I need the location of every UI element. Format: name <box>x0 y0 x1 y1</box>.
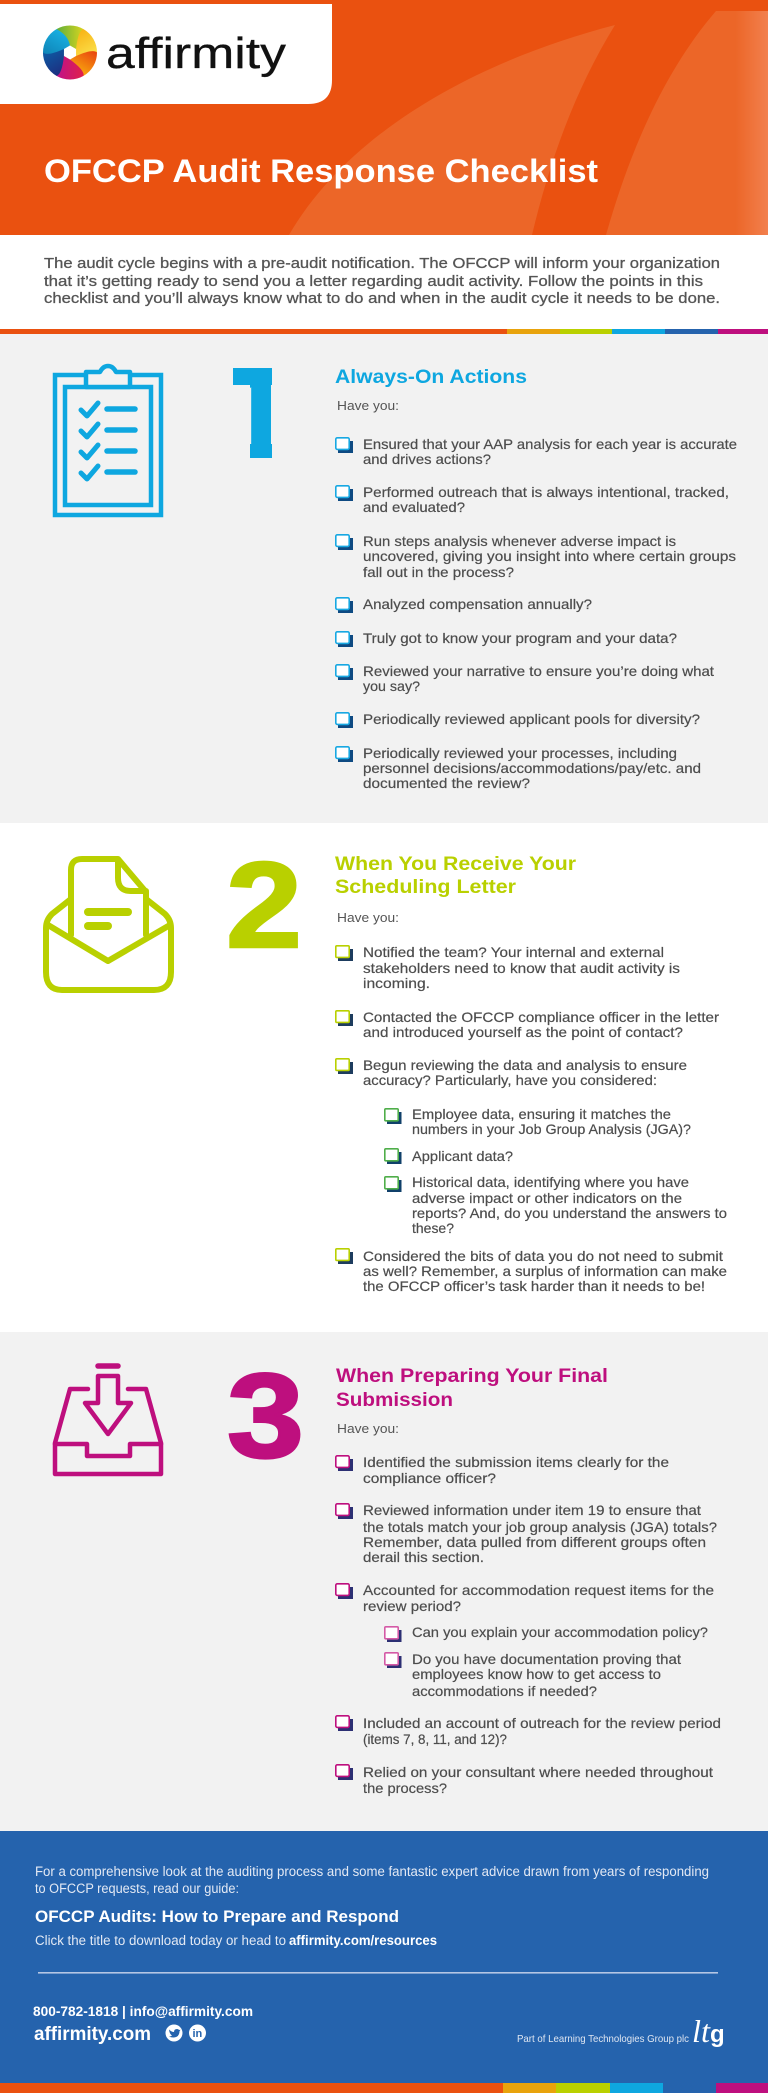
checklist item: Identified the submission items clearly for the <box>363 1454 669 1470</box>
checklist item: Included an account of outreach for the review period <box>363 1715 721 1731</box>
guide intro text <box>35 1864 709 1896</box>
checklist item: review period? <box>363 1598 461 1614</box>
sub-item: these? <box>412 1220 454 1236</box>
intro text: checklist and you’ll always know what to do and when in the audit cycle it needs to be done. <box>44 290 720 307</box>
sub-item: employees know how to get access to <box>412 1666 661 1682</box>
checklist item: and introduced yourself as the point of contact? <box>363 1024 683 1040</box>
heading: Scheduling Letter <box>335 876 516 898</box>
checklist item: Analyzed compensation annually? <box>363 596 592 612</box>
checklist item: Considered the bits of data you do not need to submit <box>363 1248 723 1264</box>
checklist item: accuracy? Particularly, have you considered: <box>363 1072 657 1088</box>
heading <box>336 1365 608 1411</box>
contact details: 800-782-1818 | info@affirmity.com <box>33 2004 253 2019</box>
checklist item <box>336 436 737 467</box>
intro text: that it’s getting ready to send you a letter regarding audit activity. Follow the points in this <box>44 273 703 290</box>
checklist item: Truly got to know your program and your data? <box>363 630 677 646</box>
panel: blue footer <box>0 1831 768 2083</box>
checklist item: the totals match your job group analysis (JGA) totals? <box>363 1519 717 1535</box>
sub-item: Do you have documentation proving that <box>412 1651 681 1667</box>
sub-item: Historical data, identifying where you have <box>412 1174 689 1190</box>
checklist item <box>336 1057 687 1088</box>
checklist item: (items 7, 8, 11, and 12)? <box>363 1731 507 1747</box>
sub-item: accommodations if needed? <box>412 1683 597 1699</box>
logo panel <box>0 4 332 104</box>
icon: open envelope with letter <box>46 859 171 990</box>
checklist item <box>336 1582 714 1614</box>
checklist item: Reviewed your narrative to ensure you’re doing what <box>363 663 714 679</box>
heading: Submission <box>336 1389 453 1411</box>
website: affirmity.com <box>34 2024 151 2045</box>
prompt: Have you: <box>337 399 399 413</box>
checklist item: fall out in the process? <box>363 564 514 580</box>
checklist item: personnel decisions/accommodations/pay/etc. and <box>363 760 701 776</box>
ltg logo: g <box>710 2021 725 2048</box>
intro text: The audit cycle begins with a pre-audit notification. The OFCCP will inform your organization <box>44 255 720 272</box>
heading: When Preparing Your Final <box>336 1365 608 1387</box>
checklist item: Contacted the OFCCP compliance officer in the letter <box>363 1009 719 1025</box>
guide title: OFCCP Audits: How to Prepare and Respond <box>35 1908 399 1926</box>
panel: section 3 final submission <box>0 1332 768 1831</box>
download text: Click the title to download today or head to <box>35 1933 286 1948</box>
checklist item <box>336 944 680 991</box>
checklist item: stakeholders need to know that audit activity is <box>363 960 680 976</box>
checklist item <box>336 1502 717 1565</box>
checklist item <box>336 484 729 515</box>
prompt: Have you: <box>337 911 399 925</box>
icon: linkedin <box>189 2024 206 2042</box>
number 3: 3 <box>227 1349 304 1483</box>
icon: twitter <box>166 2024 182 2042</box>
heading: When You Receive Your <box>335 853 576 875</box>
bottom colour bar <box>0 2083 768 2093</box>
panel: section 2 scheduling letter <box>0 823 768 1332</box>
sub-item <box>385 1651 681 1699</box>
ltg logo <box>692 2013 725 2049</box>
checklist item: you say? <box>363 678 420 694</box>
colour divider <box>0 329 768 334</box>
sub-item: Can you explain your accommodation policy? <box>412 1624 708 1640</box>
guide intro text: to OFCCP requests, read our guide: <box>35 1881 239 1896</box>
checklist item <box>336 533 736 580</box>
checklist item: Run steps analysis whenever adverse impact is <box>363 533 676 549</box>
panel: section 1 always-on actions <box>0 334 768 823</box>
checklist item: Accounted for accommodation request items for the <box>363 1582 714 1598</box>
checklist item: Periodically reviewed applicant pools for diversity? <box>363 711 700 727</box>
checklist item: Reviewed information under item 19 to ensure that <box>363 1502 701 1518</box>
checklist item: as well? Remember, a surplus of information can make <box>363 1263 727 1279</box>
checklist item: the process? <box>363 1780 447 1796</box>
checklist item: Relied on your consultant where needed throughout <box>363 1764 713 1780</box>
title: OFCCP Audit Response Checklist <box>44 153 598 189</box>
number 1: 1 <box>222 343 294 485</box>
checklist item <box>336 745 701 791</box>
checklist item: and drives actions? <box>363 451 491 467</box>
checklist item: Begun reviewing the data and analysis to ensure <box>363 1057 687 1073</box>
checklist item <box>336 1009 719 1040</box>
checklist item: derail this section. <box>363 1549 484 1565</box>
number 1 <box>233 368 272 458</box>
checklist item: Performed outreach that is always intentional, tracked, <box>363 484 729 500</box>
checklist item: Periodically reviewed your processes, including <box>363 745 677 761</box>
checklist item: compliance officer? <box>363 1470 496 1486</box>
intro text <box>44 255 720 307</box>
download text <box>35 1933 437 1948</box>
checklist item: incoming. <box>363 975 430 991</box>
checklist item: and evaluated? <box>363 499 465 515</box>
checklist item: the OFCCP officer’s task harder than it needs to be! <box>363 1278 705 1294</box>
panel: orange header <box>0 0 768 235</box>
sub-item: numbers in your Job Group Analysis (JGA)? <box>412 1121 691 1137</box>
checklist item: Remember, data pulled from different groups often <box>363 1534 706 1550</box>
sub-item: reports? And, do you understand the answers to <box>412 1205 727 1221</box>
heading: Always-On Actions <box>335 366 527 388</box>
checklist item: Notified the team? Your internal and external <box>363 944 664 960</box>
checklist item <box>336 1715 721 1747</box>
checklist item <box>336 1454 669 1486</box>
checklist item: Ensured that your AAP analysis for each year is accurate <box>363 436 737 452</box>
sub-item <box>385 1174 727 1236</box>
guide intro text: For a comprehensive look at the auditing process and some fantastic expert advice drawn from years of responding <box>35 1864 709 1879</box>
checklist item <box>336 663 714 694</box>
heading <box>335 853 576 898</box>
sub-item: Employee data, ensuring it matches the <box>412 1106 671 1122</box>
download text: affirmity.com/resources <box>289 1933 437 1948</box>
checklist item: documented the review? <box>363 775 530 791</box>
icon: affirmity swirl logo <box>40 25 100 80</box>
logo wordmark: affirmity <box>106 29 286 78</box>
icon: linkedin: in <box>192 2028 203 2040</box>
ltg logo: lt <box>692 2013 711 2049</box>
prompt: Have you: <box>337 1422 399 1436</box>
number 2: 2 <box>226 837 302 973</box>
icon: inbox tray with down arrow <box>55 1366 161 1474</box>
sub-item: Applicant data? <box>412 1148 513 1164</box>
sub-item <box>385 1106 691 1137</box>
icon: clipboard checklist <box>55 366 161 515</box>
checklist item: uncovered, giving you insight into where certain groups <box>363 548 736 564</box>
sub-item: adverse impact or other indicators on the <box>412 1190 682 1206</box>
checklist item <box>336 1764 713 1796</box>
ltg tagline: Part of Learning Technologies Group plc <box>517 2033 689 2045</box>
checklist item <box>336 1248 727 1294</box>
